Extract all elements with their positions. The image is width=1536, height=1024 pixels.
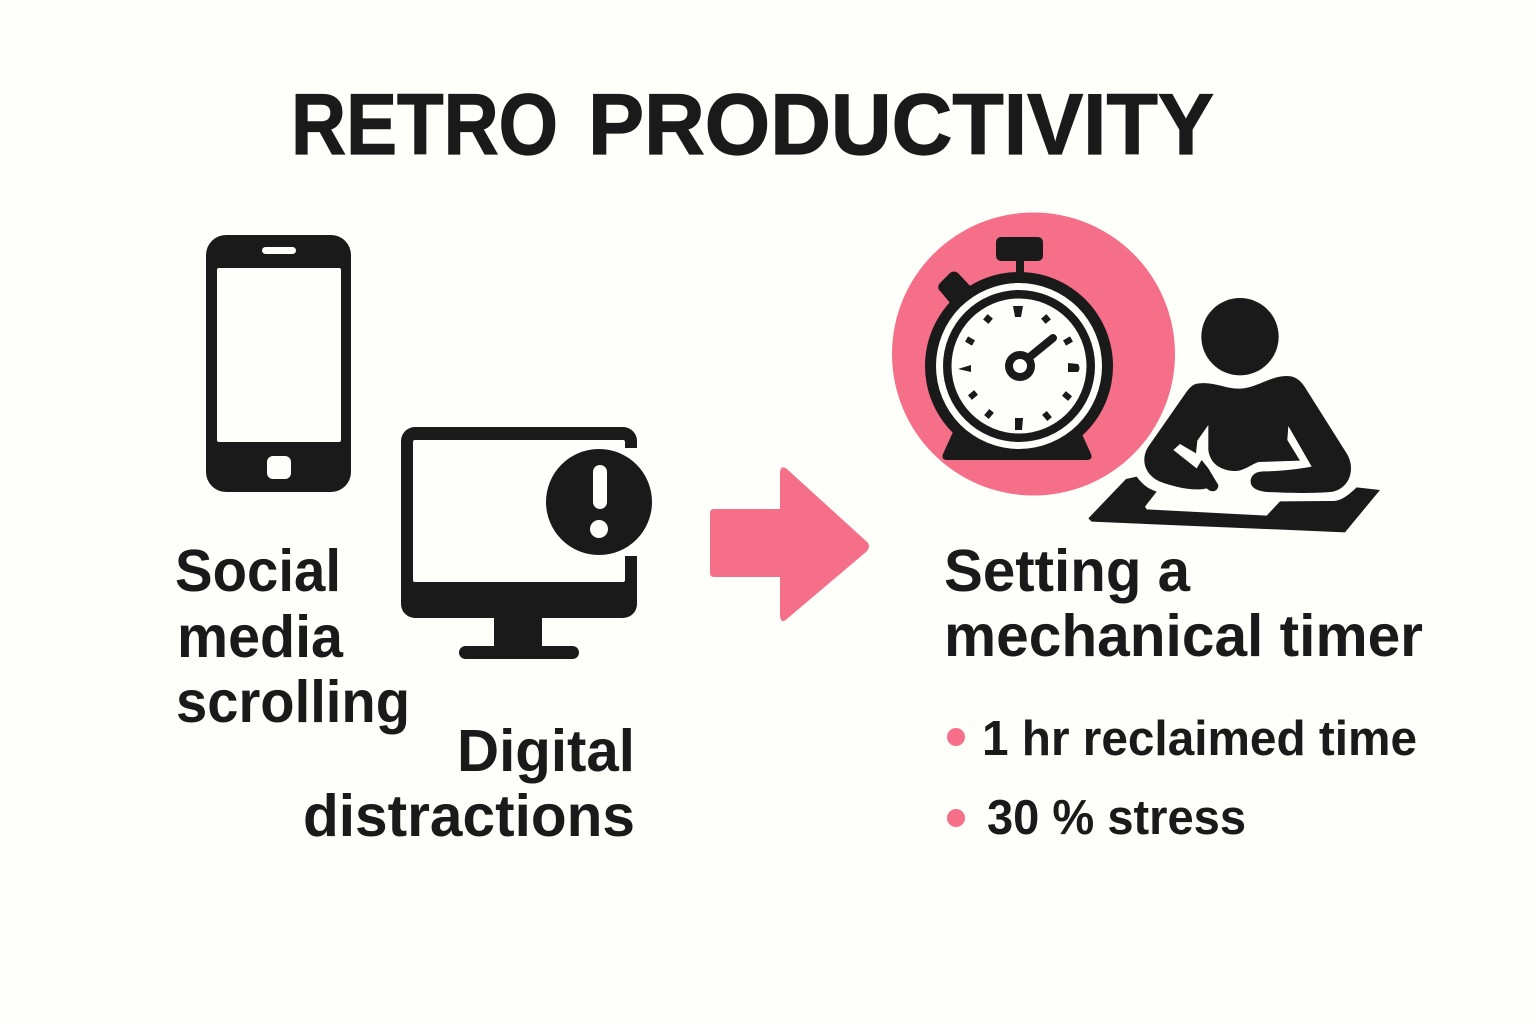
icon: smartphone (206, 235, 351, 492)
clock hand (1026, 338, 1053, 360)
bullet: stress: 30 % stress (987, 791, 1246, 845)
icon: person writing at desk (1088, 298, 1380, 532)
label: setting a mechanical timer: mechanical timer (944, 603, 1423, 669)
label: social media scrolling: media (177, 604, 344, 670)
label: digital distractions: distractions (303, 783, 635, 849)
label: setting a mechanical timer (944, 538, 1423, 669)
icon: monitor with alert (401, 427, 652, 659)
label: social media scrolling (175, 538, 410, 735)
label: social media scrolling: scrolling (176, 669, 410, 735)
icon: stopwatch (925, 237, 1113, 460)
arrow (710, 467, 869, 621)
title: PRODUCTIVITY (588, 77, 1214, 173)
icon: pink circle behind timer (892, 212, 1175, 496)
bullet: reclaimed time: 1 hr reclaimed time (982, 712, 1417, 766)
title (291, 77, 1214, 173)
label: setting a mechanical timer: Setting a (944, 538, 1191, 604)
label: digital distractions: Digital (457, 718, 635, 784)
label: social media scrolling: Social (175, 538, 341, 604)
clock ticks (958, 306, 1080, 430)
title: RETRO (291, 77, 558, 173)
label: digital distractions (303, 718, 635, 849)
